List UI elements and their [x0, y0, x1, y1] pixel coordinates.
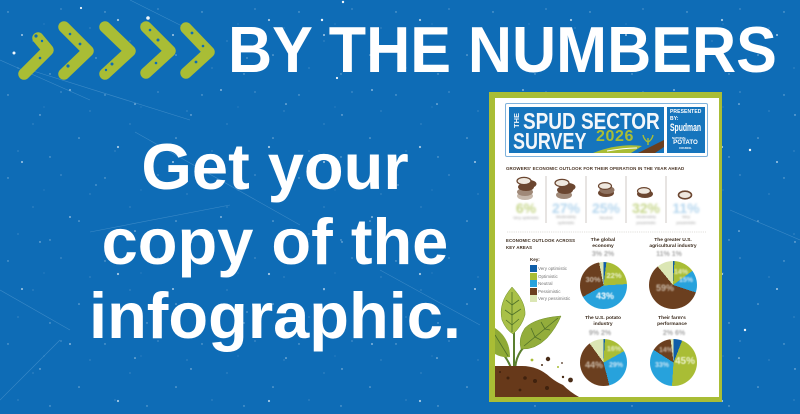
- chart: coin stats row: [507, 176, 706, 232]
- soil texture: [499, 371, 549, 391]
- legend: pessimistic: [530, 288, 561, 295]
- value: 32%: [632, 200, 660, 216]
- chart heading: global economy: [590, 238, 615, 249]
- poster white page: [495, 98, 719, 397]
- caption: [636, 214, 656, 225]
- stat: 25% neutral: [592, 200, 621, 220]
- legend: very optimistic: [530, 265, 567, 272]
- icon: five green chevrons: [18, 21, 215, 80]
- chart values: global economy small labels: 3% 2%: [592, 251, 614, 258]
- slice label: 16%: [607, 346, 621, 353]
- chart heading: potato industry: The U.S. potato: [585, 316, 621, 321]
- chart heading: farm performance: [657, 316, 687, 327]
- presented by label: BY:: [670, 116, 679, 122]
- stat: 6% very optimistic: [513, 200, 539, 220]
- coin stack 5: [678, 191, 692, 199]
- caption: Moderately: [636, 214, 656, 219]
- chart heading: potato industry: [585, 316, 621, 327]
- caption: optimistic: [558, 220, 574, 225]
- legend title: Key:: [530, 257, 540, 262]
- slice label: 45%: [675, 356, 695, 367]
- National Potato Council logo: POTATO: [673, 139, 698, 146]
- leaf veins: [495, 292, 558, 356]
- legend: very pessimistic: [530, 295, 570, 302]
- coin stack 3: [598, 183, 614, 197]
- stems: [495, 320, 530, 372]
- pie chart: farm performance: [650, 339, 697, 386]
- headline text block: [89, 130, 461, 352]
- chart heading: agricultural industry: The greater U.S.: [654, 238, 692, 243]
- caption: Very: [682, 214, 690, 219]
- soil mound: [495, 366, 579, 397]
- banner heading line 1: SPUD SECTOR: [522, 108, 659, 134]
- panel: infographic poster preview: [489, 92, 722, 402]
- presented by label: PRESENTED: [670, 109, 701, 115]
- banner title panel: [509, 107, 664, 153]
- leaf: right: [520, 316, 561, 349]
- section heading: key areas: [506, 238, 575, 250]
- green particles: [531, 359, 559, 368]
- coin stack 2: [555, 179, 576, 199]
- banner presented-by panel: [667, 107, 705, 153]
- leaf: left: [495, 328, 510, 357]
- chart heading: farm performance: performance: [657, 322, 687, 327]
- stat: 11% very pessimistic: [672, 200, 700, 225]
- slice label: 44%: [585, 360, 603, 370]
- chart heading: global economy: The global: [591, 238, 615, 243]
- banner field and soil art: [593, 134, 664, 153]
- chart values: potato small labels: 9% 2%: [589, 330, 611, 337]
- caption: pessimistic: [636, 220, 656, 225]
- banner label: the: THE: [512, 113, 521, 128]
- legend: pessimistic: Pessimistic: [538, 289, 561, 294]
- banner year: 2026: [596, 128, 634, 145]
- National Potato Council logo: [672, 136, 698, 150]
- caption: Neutral: [600, 215, 612, 220]
- caption: pessimistic: [676, 220, 696, 225]
- caption: [556, 214, 576, 226]
- caption: Very optimistic: [513, 215, 539, 220]
- value: 25%: [592, 200, 620, 216]
- legend: very optimistic: Very optimistic: [538, 266, 567, 271]
- legend: neutral: [530, 280, 553, 287]
- legend: optimistic: Optimistic: [538, 274, 558, 279]
- slice label: 59%: [656, 283, 674, 293]
- legend: neutral: Neutral: [538, 281, 553, 286]
- slice label: 14%: [659, 347, 673, 354]
- caption: Moderately: [556, 214, 576, 219]
- coin stack 4: [637, 188, 653, 198]
- pie chart: agricultural industry: [649, 261, 697, 309]
- section heading: economic outlook: GROWERS' ECONOMIC OUTLOOK FOR THEIR OPERATION IN THE YEAR AHEAD: [506, 166, 684, 171]
- National Potato Council logo: COUNCIL: [679, 146, 692, 150]
- legend: very pessimistic: Very pessimistic: [538, 296, 570, 301]
- value: 11%: [672, 200, 700, 216]
- caption: [676, 214, 696, 225]
- pie chart: global economy: [580, 262, 627, 309]
- stat: 32% pessimistic: [632, 200, 661, 225]
- chart heading: agricultural industry: agricultural industry: [649, 244, 697, 249]
- headline text block: copy of the: [102, 204, 448, 278]
- stat: 27% optimistic: [552, 200, 581, 226]
- slice label: 30%: [585, 275, 600, 284]
- slice label: 33%: [655, 362, 669, 369]
- value: 6%: [516, 200, 536, 216]
- value: 27%: [552, 200, 580, 216]
- slice label: 43%: [596, 291, 614, 301]
- National Potato Council logo: NATIONAL: [672, 136, 686, 140]
- Spudman logo: Spudman: [670, 122, 701, 134]
- slice label: 14%: [674, 269, 688, 276]
- chart values: farm small labels: 2% 6%: [663, 330, 685, 337]
- slice label: 22%: [606, 271, 622, 280]
- headline text block: Get your: [141, 130, 409, 203]
- slice label: 29%: [609, 362, 623, 369]
- soil particles: [541, 357, 573, 382]
- chart heading: farm performance: Their farm's: [658, 316, 686, 321]
- slice label: 15%: [679, 277, 693, 284]
- coin stack 1: [517, 177, 536, 200]
- banner: Spud Sector Survey: [505, 103, 708, 157]
- pie chart: potato industry: [580, 339, 627, 386]
- section heading: key areas: ECONOMIC OUTLOOK ACROSS: [506, 238, 575, 243]
- leaf: top: [501, 287, 525, 334]
- title: BY THE NUMBERS: [228, 13, 777, 86]
- chart values: agricultural small labels: 11% 1%: [656, 251, 682, 258]
- legend: optimistic: [530, 273, 558, 280]
- chart heading: global economy: economy: [592, 244, 614, 249]
- chart heading: potato industry: industry: [593, 322, 613, 327]
- section heading: key areas: KEY AREAS: [506, 244, 532, 250]
- chart heading: agricultural industry: [649, 238, 697, 249]
- illustration: seedling in soil: [495, 287, 579, 397]
- presented by label: [670, 109, 702, 122]
- headline text block: infographic.: [89, 279, 461, 352]
